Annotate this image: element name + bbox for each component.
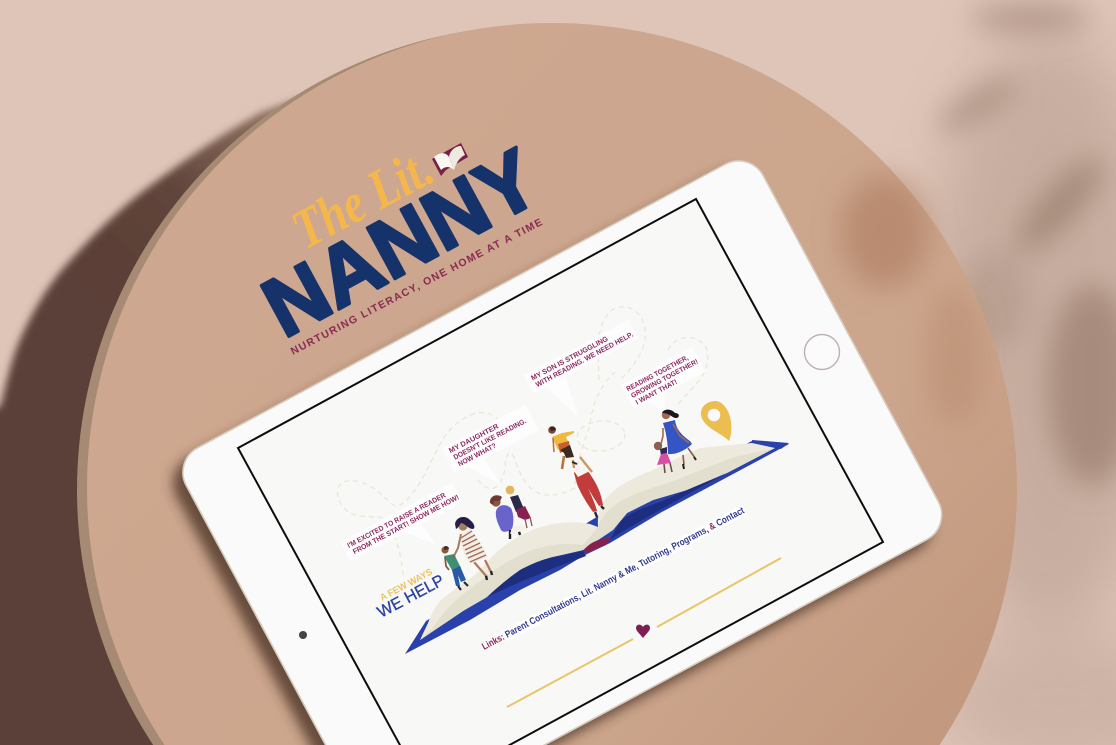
speech bubble 1 [340,483,475,584]
divider line right [657,558,781,627]
woman head [458,521,468,531]
icon: location pin [701,401,731,441]
logo [248,130,554,358]
home button [804,334,840,370]
the lit script: The Lit. [282,136,444,261]
icon: open book [432,143,468,176]
figure: woman in red trousers lifting child [548,426,604,517]
palm leaf shadow, right side [930,4,1116,745]
speech bubble 3: WITH READING. WE NEED HELP. [534,330,634,389]
divider with heart [507,558,781,707]
speech bubble 2: MY DAUGHTER [447,421,501,455]
right cover lip [752,440,789,449]
child on shoulders [548,426,556,434]
blue dress [683,448,695,465]
speech bubble 1: I'M EXCITED TO RAISE A READER [346,490,448,550]
red trousers [574,469,603,512]
broad dusk tone [930,30,1116,630]
camera [299,631,307,639]
links text: Links: Parent Consultations, Lit. Nanny & Me, Tutoring, Programs, & Contact [480,505,747,653]
divider line left [507,639,633,707]
book illustration [405,440,789,654]
woman legs [474,560,491,577]
figure: woman in blue dress with girl [654,410,696,473]
tagline: NURTURING LITERACY, ONE HOME AT A TIME [289,216,544,358]
dark inner cover, left [487,551,586,597]
tablet cast shadow [163,162,942,745]
leaf streaks [932,4,1116,485]
adult [496,505,513,532]
speech bubble 3 [524,320,657,430]
dashed journey path [337,307,708,575]
speech bubble 2: DOESN'T LIKE READING. [452,416,528,462]
speech bubble 2 [442,405,553,501]
speech bubble 4: I WANT THAT! [635,379,679,406]
figure: adult and child with blonde hair [490,486,532,539]
a few ways we help heading [374,567,447,622]
boy [441,546,449,554]
book cover [405,441,789,654]
speech bubble 4: GROWING TOGETHER! [630,359,700,400]
nanny wordmark: NANNY [248,130,554,355]
a few ways: A FEW WAYS [378,567,435,604]
links highlight [501,505,747,641]
dark inner cover, right [610,473,727,540]
striped dress [460,528,488,564]
woman arm [454,534,461,556]
screen [238,199,883,745]
book pages [420,443,775,640]
speech bubble 3: MY SON IS STRUGGLING [529,334,610,382]
page shading [420,448,775,640]
we help: WE HELP [374,571,447,622]
speech bubble 4 [621,347,714,426]
speech bubble 1: FROM THE START! SHOW ME HOW! [351,493,461,556]
icon: heart [636,625,650,638]
figure: woman in striped dress with boy [441,517,492,590]
tablet body [173,151,952,745]
girl [664,463,672,473]
speech bubble 2: NOW WHAT? [456,441,498,468]
book spine [583,538,611,553]
leaf shadows on the tray [841,176,985,425]
speech bubble 4: READING TOGETHER, [626,355,690,393]
tray cast shadow, left crescent [0,98,320,745]
child [510,525,527,534]
links row [480,505,747,653]
